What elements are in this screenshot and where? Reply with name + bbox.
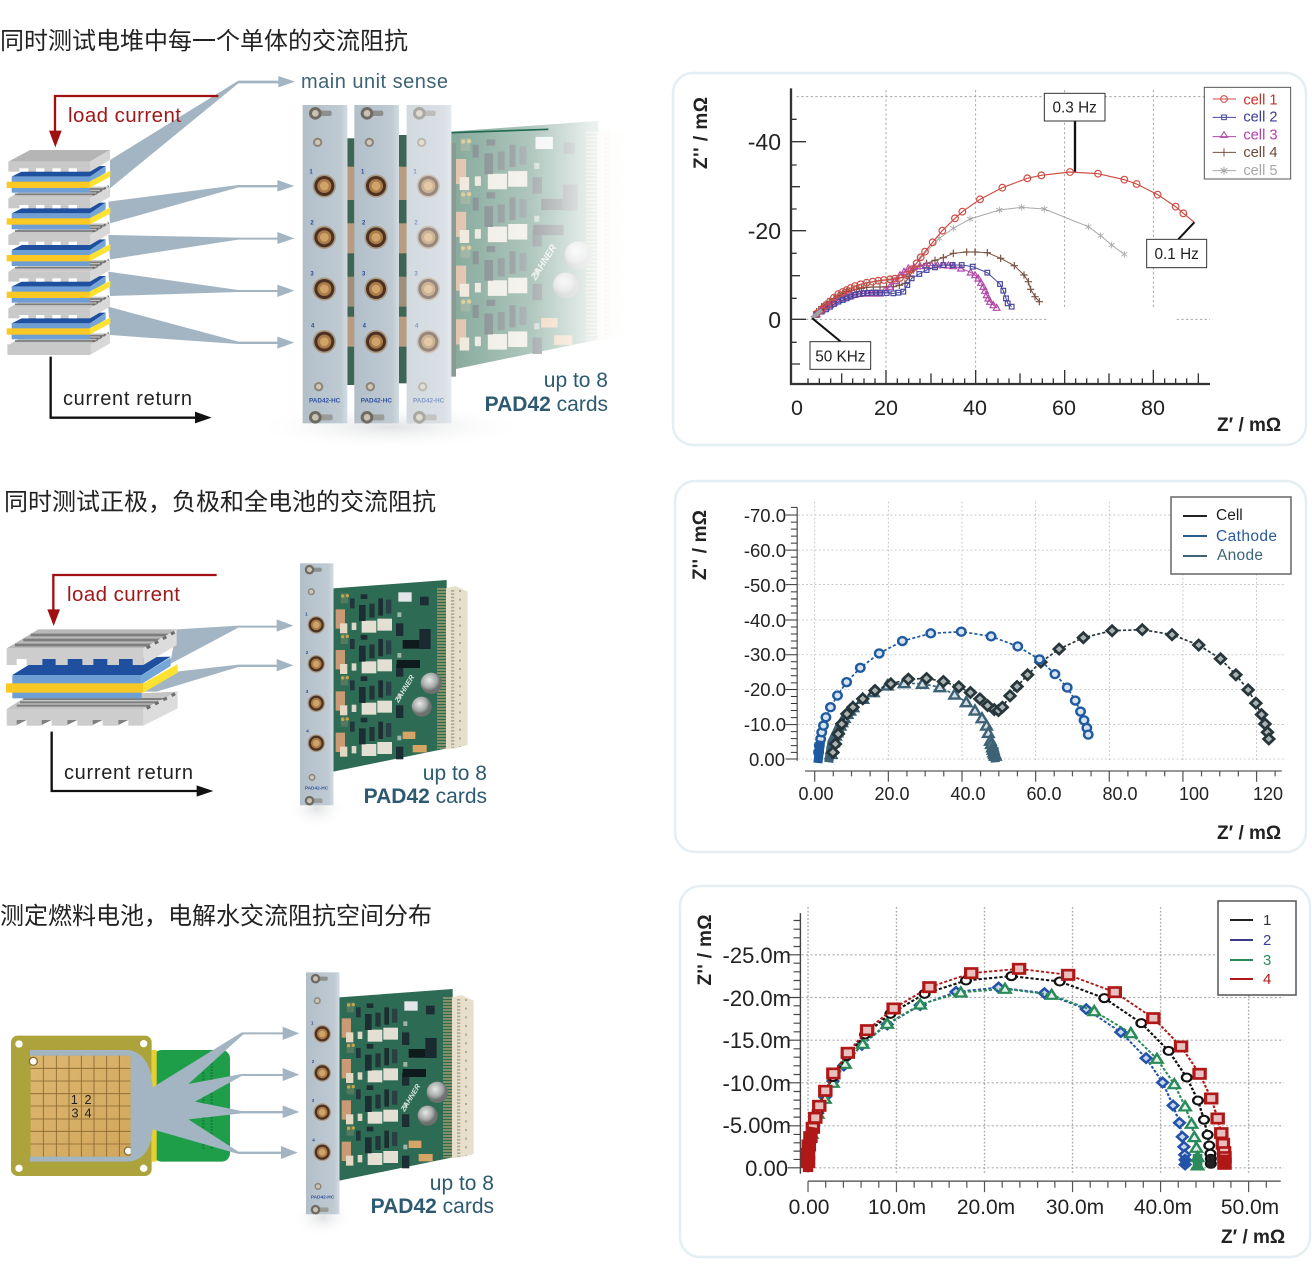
y axis labels: -5.00m (723, 1113, 791, 1138)
series: anode (829, 683, 995, 762)
board edges between plates (347, 135, 456, 385)
y axis labels: -60.0 (744, 540, 786, 561)
y axis labels (748, 129, 781, 333)
x axis labels (789, 1196, 1279, 1219)
front plate 2 (354, 105, 399, 424)
series cell 2 (812, 265, 1012, 318)
label: current return: current return (63, 388, 192, 410)
sense arrows (108, 76, 295, 349)
series 4 (808, 969, 1225, 1172)
y axis labels: -10.0 (744, 714, 786, 735)
membrane layers (6, 657, 178, 698)
legend (1171, 497, 1291, 574)
plot area (786, 502, 1284, 782)
x axis labels (791, 396, 1165, 420)
caption: up to 8 PAD42 cards: up to 8 (430, 1172, 494, 1195)
y axis title: Z'' / mΩ (691, 97, 712, 169)
callout: 50 KHz: 50 KHz (815, 348, 865, 365)
x axis title: Z′ / mΩ (1217, 415, 1281, 436)
label: load current: load current (68, 104, 181, 127)
x axis labels: 40.0m (1134, 1196, 1192, 1219)
legend: 2 (1263, 932, 1271, 949)
y axis labels: -20.0 (744, 679, 786, 700)
segment numbers: 4 (84, 1107, 92, 1121)
legend: Cell (1216, 507, 1243, 524)
callout: 0.1 Hz: 0.1 Hz (1155, 246, 1199, 263)
legend: cells: cell 2 (1243, 110, 1278, 126)
y axis labels: -40 (748, 129, 781, 155)
series cell 5 (812, 207, 1124, 318)
lower plate (7, 692, 178, 726)
series 1 (808, 976, 1211, 1168)
diagram: single cell with electrodes (6, 575, 293, 797)
legend: cells: cell 3 (1243, 127, 1278, 143)
x axis labels: 20.0m (957, 1196, 1015, 1219)
floor shadow (293, 1197, 353, 1237)
sense arrows fan (30, 1027, 299, 1162)
load current arrow (47, 575, 217, 626)
x axis labels: 10.0m (868, 1196, 926, 1219)
y axis labels: -25.0m (723, 943, 791, 968)
sense arrows (143, 619, 293, 692)
y axis labels: -10.0m (723, 1071, 791, 1096)
x axis labels: 20.0 (874, 784, 910, 804)
caption: up to 8 PAD42 cards: PAD42 cards (371, 1195, 494, 1218)
segment numbers: 3 (71, 1107, 79, 1121)
green connector board (153, 1050, 230, 1162)
y axis labels: -30.0 (744, 644, 786, 665)
series: cathode (818, 632, 1088, 763)
legend: cells: cell 1 (1243, 92, 1278, 108)
PAD42 card (293, 972, 474, 1237)
panel: chart 1 impedance per cell (673, 73, 1306, 445)
floor shadow (287, 788, 347, 828)
x axis labels: 60.0 (1026, 784, 1062, 804)
series: cell (832, 630, 1269, 759)
y axis labels: -70.0 (744, 505, 786, 526)
x axis labels: 0 (791, 396, 803, 420)
x axis labels: 60 (1052, 396, 1076, 420)
x axis labels: 50.0m (1221, 1196, 1279, 1219)
y axis labels: 0 (768, 307, 781, 333)
x axis labels: 80 (1141, 396, 1165, 420)
label: main unit sense: main unit sense (301, 71, 448, 93)
series 2 (808, 987, 1185, 1168)
load current arrow (49, 96, 218, 147)
callout: 0.1 Hz (1147, 222, 1207, 268)
panel: chart 3 spatial distribution (680, 886, 1310, 1257)
legend: 4 (1263, 971, 1271, 988)
x axis labels: 80.0 (1102, 784, 1138, 804)
callout: 0.3 Hz (1044, 93, 1105, 172)
diagram: segmented fuel cell board (11, 1027, 299, 1176)
fuel cell stack (7, 150, 110, 355)
x axis labels: 30.0m (1046, 1196, 1104, 1219)
PAD42 cards: three cards (250, 105, 628, 450)
circuit board (333, 580, 468, 772)
callout: 50 KHz (810, 318, 871, 369)
front plate 1 (303, 105, 347, 424)
x axis title: Z′ / mΩ (1217, 823, 1281, 844)
x axis labels: 100 (1179, 784, 1209, 804)
legend (1218, 901, 1296, 995)
legend: Cathode (1216, 528, 1277, 545)
y axis labels: -20.0m (723, 986, 791, 1011)
front plate (306, 972, 339, 1215)
y axis title: Z'' / mΩ (695, 914, 716, 986)
caption: up to 8 PAD42 cards: PAD42 cards (364, 785, 487, 808)
heading: section 2: 同时测试正极，负极和全电池的交流阻抗 (4, 489, 436, 516)
legend: 3 (1263, 952, 1271, 969)
faded circuit board (451, 120, 628, 387)
segment numbers: 1 (71, 1093, 78, 1107)
x axis labels: 40 (963, 396, 987, 420)
y axis labels: -15.0m (723, 1028, 791, 1053)
current return arrow (52, 732, 213, 797)
y axis labels: -50.0 (744, 575, 786, 596)
floor shadow (250, 403, 530, 450)
legend: cells: cell 5 (1243, 163, 1278, 179)
x axis labels: 20 (874, 396, 898, 420)
heading: section 3: 测定燃料电池，电解水交流阻抗空间分布 (0, 903, 432, 930)
x axis title: Z′ / mΩ (1221, 1227, 1285, 1248)
y axis labels (744, 505, 786, 770)
caption: up to 8 PAD42 cards: PAD42 cards (485, 393, 608, 416)
current return arrow (51, 357, 212, 423)
x axis labels (798, 784, 1283, 804)
plot area (788, 907, 1284, 1192)
y axis labels: 0.00 (745, 1156, 788, 1181)
legend: cells (1204, 87, 1291, 179)
x axis labels: 40.0 (950, 784, 986, 804)
legend: cells: cell 4 (1243, 145, 1278, 161)
label: load current: load current (67, 583, 180, 606)
label: current return: current return (64, 762, 193, 784)
legend: 1 (1263, 912, 1271, 929)
heading: section 1: 同时测试电堆中每一个单体的交流阻抗 (0, 28, 408, 55)
series cell 3 (812, 265, 997, 318)
series cell 1 (812, 172, 1194, 318)
PAD42 card (287, 563, 468, 828)
y axis labels (723, 943, 791, 1181)
front plate (300, 563, 333, 806)
series 3 (808, 989, 1198, 1168)
legend: Anode (1217, 547, 1263, 564)
caption: up to 8 PAD42 cards: up to 8 (423, 762, 487, 785)
diagram: cell stack with sense wedges (7, 76, 295, 423)
segment numbers: 2 (84, 1093, 92, 1107)
upper plate (7, 629, 177, 665)
front plate 3, faded (407, 105, 451, 424)
callout: 0.3 Hz: 0.3 Hz (1053, 100, 1097, 117)
segment numbers (71, 1093, 92, 1121)
x axis labels: 0.00 (798, 784, 834, 804)
caption: up to 8 PAD42 cards: up to 8 (544, 369, 608, 392)
x axis labels: 120 (1253, 784, 1283, 804)
plot area (791, 87, 1291, 384)
x axis labels: 0.00 (789, 1196, 829, 1219)
series cell 4 (812, 252, 1039, 318)
gold segmented grid (29, 1056, 132, 1157)
y axis labels: -40.0 (744, 610, 786, 631)
y axis title: Z'' / mΩ (690, 510, 711, 580)
olive frame (11, 1036, 157, 1176)
y axis labels: 0.00 (749, 749, 785, 770)
circuit board (339, 989, 474, 1181)
y axis labels: -20 (748, 218, 781, 244)
panel: chart 2 cell, cathode, anode (675, 481, 1306, 852)
